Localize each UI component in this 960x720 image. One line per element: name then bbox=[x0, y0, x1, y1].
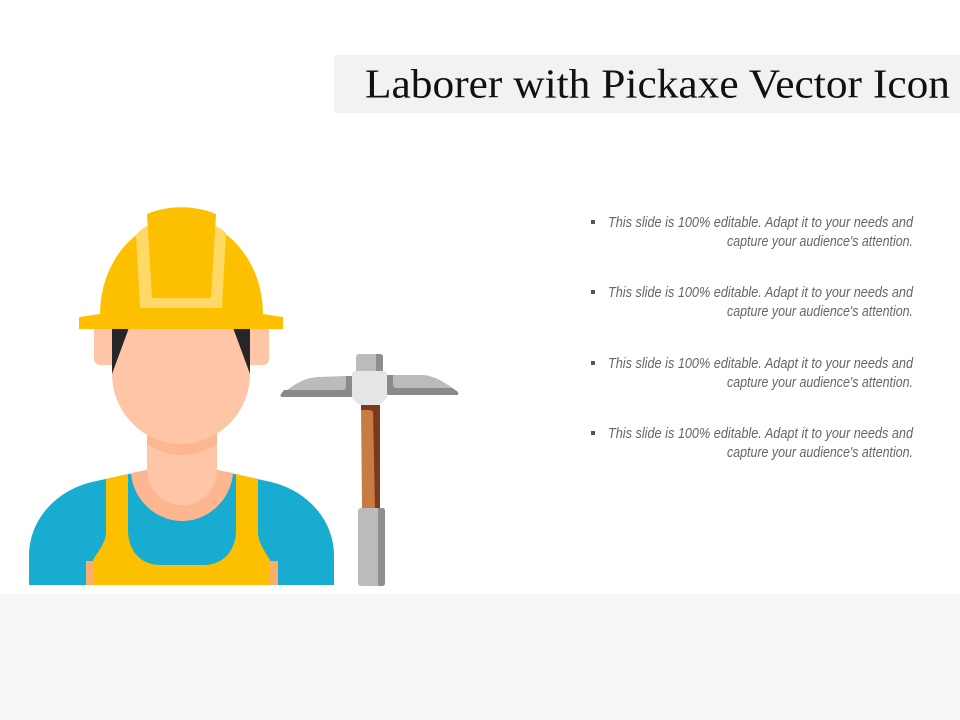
neck shadow bbox=[147, 425, 217, 455]
torso shirt bbox=[29, 470, 334, 585]
bullet 4 bbox=[591, 425, 914, 461]
helmet stripe bbox=[136, 226, 226, 308]
right blade bbox=[387, 375, 458, 395]
handle bbox=[361, 405, 380, 508]
overalls bbox=[93, 474, 270, 585]
left blade bbox=[281, 376, 352, 397]
icon: laborer bbox=[29, 207, 334, 585]
face bbox=[112, 322, 250, 444]
bottom band bbox=[0, 594, 960, 720]
icon: pickaxe bbox=[280, 354, 458, 586]
ears bbox=[94, 322, 269, 365]
title: Laborer with Pickaxe Vector Icon bbox=[365, 60, 950, 106]
bullet 2 bbox=[591, 284, 914, 320]
bullet 1: This slide is 100% editable. Adapt it to your needs and bbox=[608, 214, 914, 231]
bullet 1 bbox=[591, 214, 914, 250]
grip bbox=[358, 508, 385, 586]
head block bbox=[352, 371, 387, 405]
bullet 4: This slide is 100% editable. Adapt it to your needs and bbox=[608, 425, 914, 442]
bullet 3 bbox=[591, 355, 914, 391]
helmet crest bbox=[147, 207, 216, 298]
bullet list bbox=[591, 214, 914, 461]
helmet dome bbox=[79, 219, 283, 329]
hair bbox=[112, 325, 250, 374]
neck bbox=[147, 425, 217, 505]
collar bbox=[131, 470, 233, 521]
overall side patches bbox=[86, 561, 278, 585]
bullet 4: capture your audience's attention. bbox=[727, 444, 913, 461]
bullet 2: capture your audience's attention. bbox=[727, 303, 913, 320]
bullet 3: capture your audience's attention. bbox=[727, 374, 913, 391]
bullet 3: This slide is 100% editable. Adapt it to your needs and bbox=[608, 355, 914, 372]
bullet 1: capture your audience's attention. bbox=[727, 233, 913, 250]
top cap bbox=[356, 354, 383, 374]
bullet 2: This slide is 100% editable. Adapt it to your needs and bbox=[608, 284, 914, 301]
